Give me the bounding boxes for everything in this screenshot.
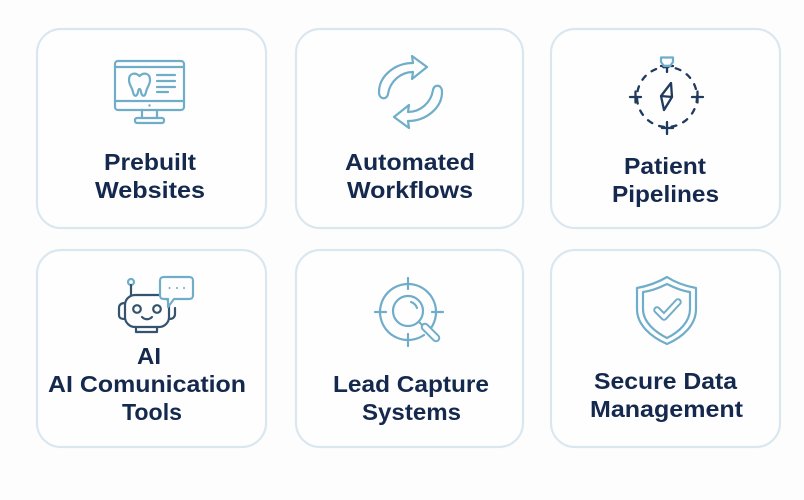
heading: Prebuilt Websites: Prebuilt bbox=[104, 149, 196, 175]
icon: monitor with tooth bbox=[115, 61, 184, 123]
heading: Secure Data Management: Management bbox=[590, 396, 743, 422]
heading: AI Comunication Tools: AI bbox=[137, 343, 161, 369]
heading: Lead Capture Systems: Lead Capture bbox=[333, 371, 489, 397]
heading: Prebuilt Websites: Websites bbox=[95, 177, 205, 203]
heading: Patient Pipelines: Pipelines bbox=[612, 181, 719, 207]
panel: Secure Data Management bbox=[551, 250, 780, 447]
heading: Prebuilt Websites bbox=[95, 149, 205, 203]
heading: Secure Data Management: Secure Data bbox=[594, 368, 737, 394]
icon: circular arrows bbox=[379, 56, 442, 128]
icon: shield with check bbox=[637, 277, 696, 344]
heading: Patient Pipelines bbox=[612, 153, 719, 207]
heading: Lead Capture Systems: Systems bbox=[362, 399, 461, 425]
heading: AI Comunication Tools bbox=[48, 343, 246, 425]
heading: Automated Workflows: Automated bbox=[345, 149, 475, 175]
heading: Automated Workflows bbox=[345, 149, 475, 203]
icon: dashed compass bbox=[630, 58, 703, 134]
icon: target with magnifier bbox=[375, 278, 443, 346]
heading: AI Comunication Tools: Tools bbox=[122, 399, 182, 425]
panel: Patient Pipelines bbox=[551, 29, 780, 228]
heading: Secure Data Management bbox=[590, 368, 743, 422]
panel: Lead Capture Systems bbox=[296, 250, 523, 447]
icon: robot with speech bubble bbox=[119, 277, 193, 332]
heading: Automated Workflows: Workflows bbox=[347, 177, 473, 203]
heading: AI Comunication Tools: AI Comunication bbox=[48, 371, 246, 397]
panel: Automated Workflows bbox=[296, 29, 523, 228]
heading: Lead Capture Systems bbox=[333, 371, 489, 425]
heading: Patient Pipelines: Patient bbox=[624, 153, 706, 179]
panel: Prebuilt Websites bbox=[37, 29, 266, 228]
panel: AI Communication Tools bbox=[37, 250, 266, 447]
